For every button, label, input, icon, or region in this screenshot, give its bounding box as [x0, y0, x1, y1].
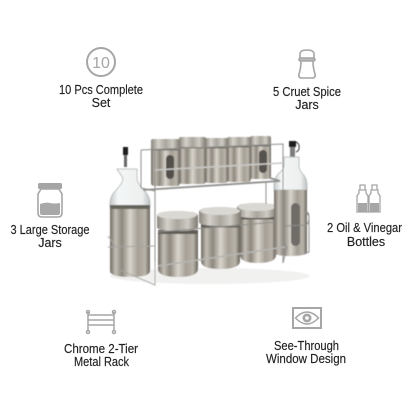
feature: 2 Oil & Vinegar Bottles	[327, 185, 402, 249]
label: 10 Pcs Complete Set	[59, 83, 143, 110]
feature: Chrome 2-Tier Metal Rack	[64, 310, 138, 369]
label: 5 Cruet Spice Jars: Jars	[295, 98, 319, 112]
label: 10 Pcs Complete Set: Set	[92, 96, 111, 110]
label: Chrome 2-Tier Metal Rack: Metal Rack	[74, 355, 130, 369]
upper tier spice jars	[151, 136, 271, 186]
right vinegar bottle	[274, 141, 307, 256]
feature: 10 Pcs Complete Set	[59, 48, 143, 110]
left oil bottle	[110, 147, 150, 277]
feature: See-Through Window Design	[266, 308, 346, 366]
label: Chrome 2-Tier Metal Rack	[64, 342, 138, 369]
floor shadow	[110, 268, 310, 284]
label: 3 Large Storage Jars: 3 Large Storage	[10, 223, 90, 237]
label: See-Through Window Design	[266, 339, 346, 366]
icon: eye in window	[293, 308, 321, 328]
large storage jars	[157, 203, 277, 277]
icon: salt shaker	[299, 50, 315, 78]
icon: storage jar	[38, 183, 62, 217]
product photo: chrome rack with jars and bottles	[108, 136, 310, 285]
feature: 3 Large Storage Jars	[10, 183, 90, 250]
label: 3 Large Storage Jars: Jars	[38, 236, 62, 250]
label: 2 Oil & Vinegar Bottles	[327, 221, 402, 249]
label: Chrome 2-Tier Metal Rack: Chrome 2-Tier	[64, 342, 138, 356]
label: 2 Oil & Vinegar Bottles: 2 Oil & Vinegar	[327, 221, 402, 235]
label: 10 Pcs Complete Set: 10 Pcs Complete	[59, 83, 143, 97]
icon: two bottles	[357, 185, 380, 212]
label: 3 Large Storage Jars	[10, 223, 90, 250]
feature: 5 Cruet Spice Jars	[273, 50, 341, 112]
label: 2 Oil & Vinegar Bottles: Bottles	[347, 235, 385, 249]
label: 5 Cruet Spice Jars	[273, 85, 341, 112]
label: See-Through Window Design: Window Design	[266, 352, 346, 366]
icon: metal rack	[86, 310, 116, 334]
icon: number 10 in circle: 10	[92, 55, 110, 72]
label: 5 Cruet Spice Jars: 5 Cruet Spice	[273, 85, 341, 99]
chrome rack	[108, 144, 309, 285]
label: See-Through Window Design: See-Through	[274, 339, 339, 353]
